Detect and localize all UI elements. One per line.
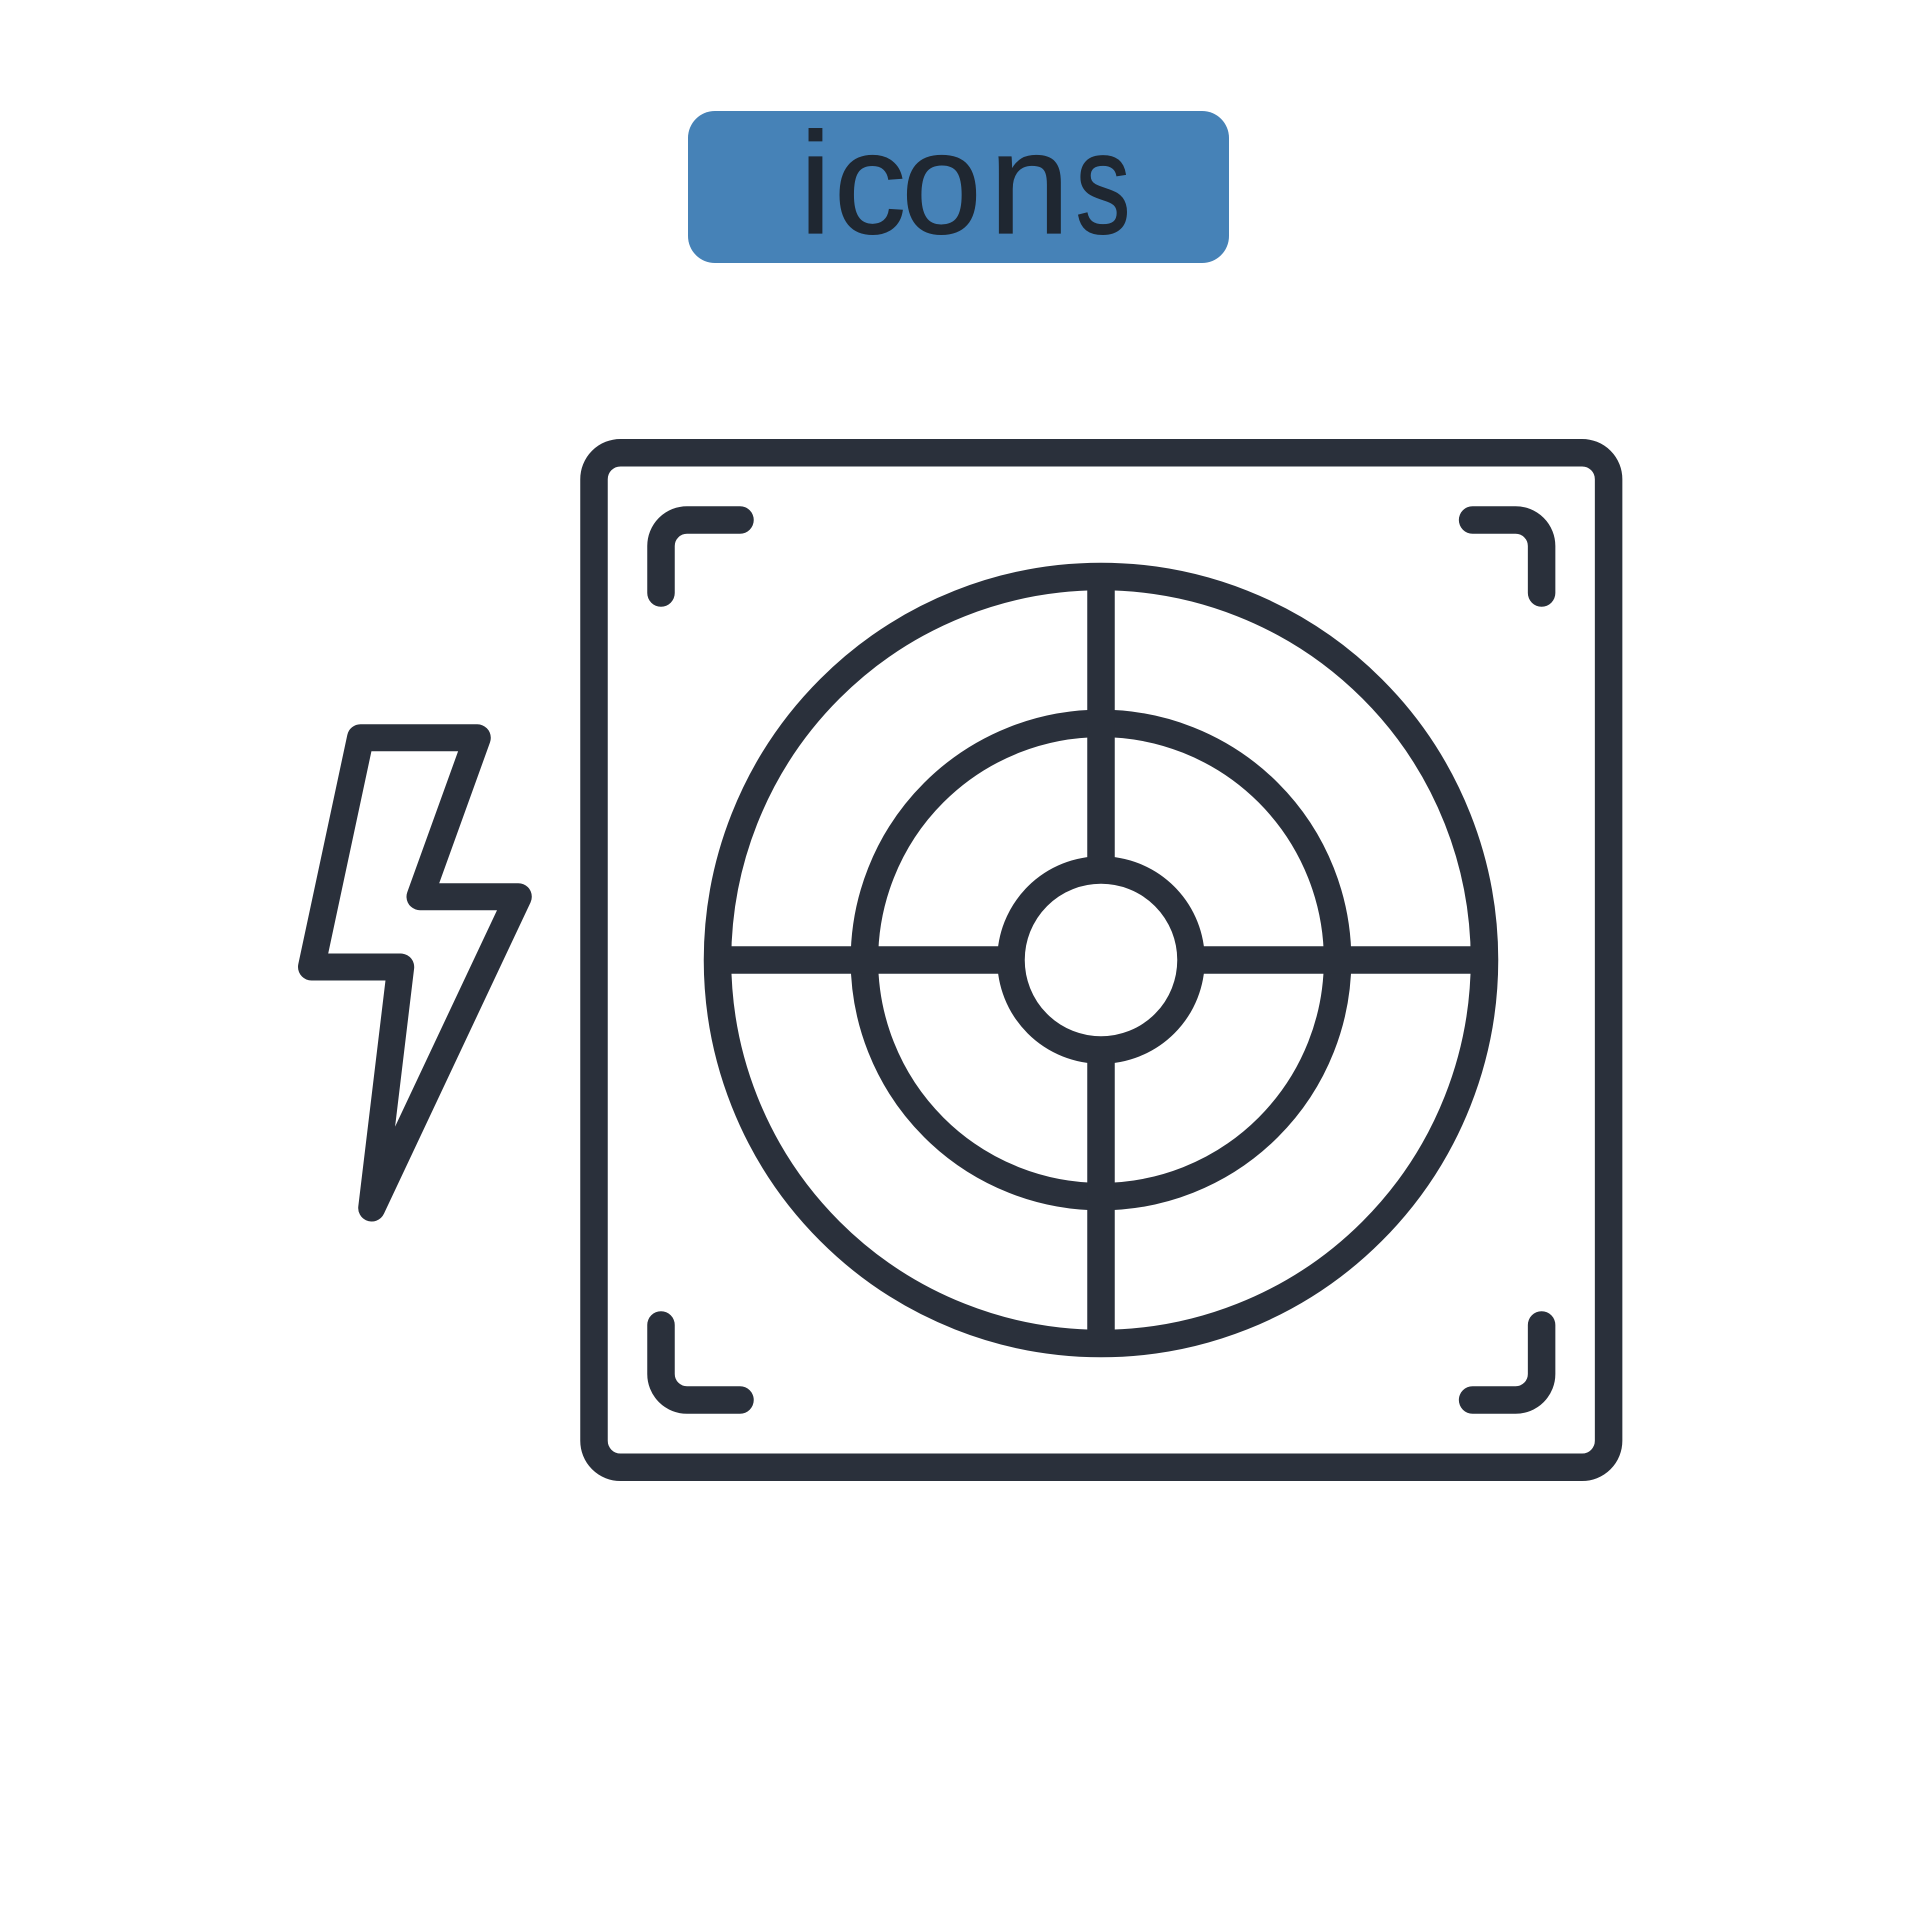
- icon: power supply fan unit: [594, 453, 1609, 1467]
- icon: lightning bolt: [312, 738, 518, 1208]
- badge text: icon: [800, 103, 1070, 264]
- corner bracket: top left: [661, 520, 740, 593]
- middle ring: [864, 723, 1338, 1197]
- corner bracket: top right: [1473, 520, 1542, 593]
- badge: icons label: [688, 103, 1229, 264]
- corner bracket: bottom right: [1473, 1325, 1542, 1400]
- centre hub: [1011, 870, 1191, 1050]
- outer ring: [718, 576, 1484, 1344]
- badge background: [688, 111, 1229, 263]
- corner bracket: bottom left: [661, 1325, 740, 1400]
- fan grille: [718, 576, 1484, 1344]
- grille spokes: [718, 577, 1484, 1343]
- badge text: s: [1076, 103, 1130, 264]
- housing frame: [594, 453, 1609, 1467]
